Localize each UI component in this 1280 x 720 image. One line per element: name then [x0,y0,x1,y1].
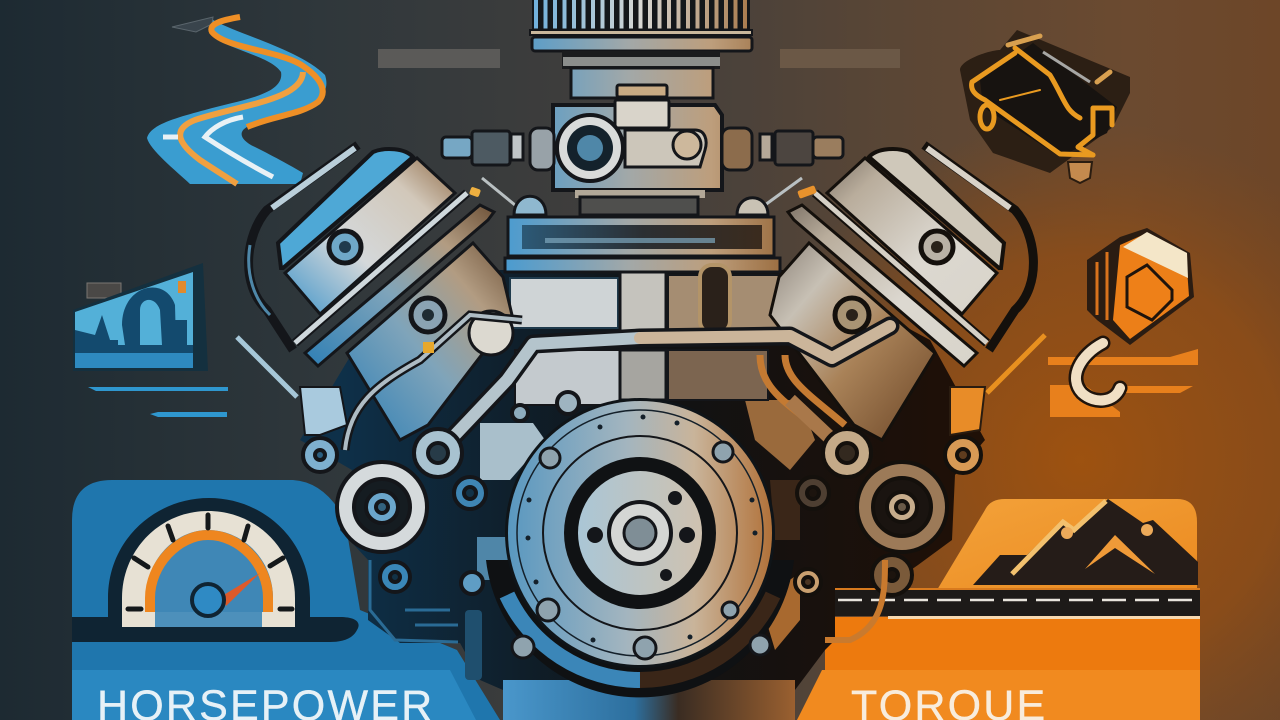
engine dark silhouette [300,270,985,720]
icon: engine belt part [960,30,1130,183]
engine illustration [237,0,1045,720]
left pulleys [303,392,579,594]
side castings around the flywheel [477,400,815,650]
speedometer gauge [72,498,359,642]
lower left housing [370,560,482,680]
orange speed lines [1048,349,1198,417]
right orange pipes [760,355,845,452]
right pulleys [795,429,981,595]
bottom column [503,680,795,720]
right cylinder head [770,145,1033,440]
placeholder bars at top [378,49,900,68]
flywheel bolts [587,491,695,581]
panel: torque [797,499,1200,720]
panel: horsepower [72,480,500,720]
air filter [530,0,752,98]
icon: winding road [147,17,326,184]
small pipes [482,178,802,215]
intake manifold [505,217,780,405]
crankshaft flywheel [485,378,795,697]
icon: city skyline card [73,263,208,371]
lower right pipe [825,560,885,640]
mountain and road [832,499,1200,619]
right brace and bracket [950,335,1045,435]
blue speed lines [88,387,228,417]
throttle side arms [442,128,843,170]
icon: tow hook [1076,228,1194,400]
throttle body [553,85,722,215]
left cylinder head [237,145,522,450]
coolant pipe [438,326,890,453]
